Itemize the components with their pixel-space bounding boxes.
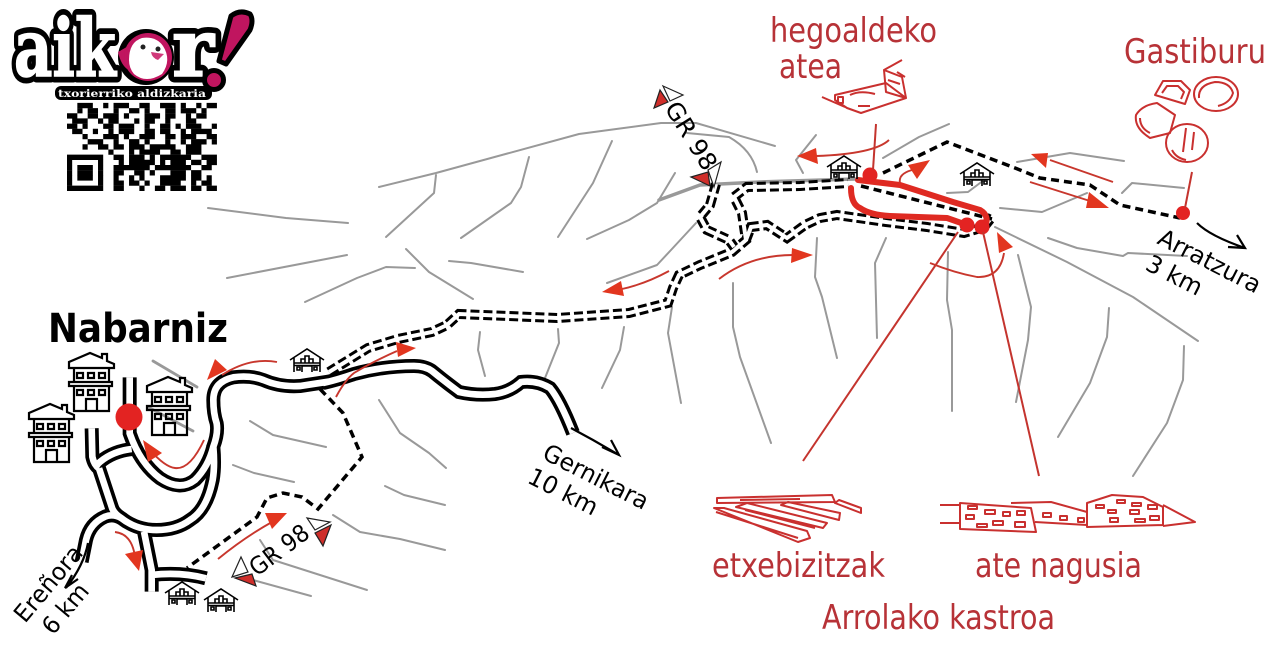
- logo tagline: [55, 86, 212, 100]
- red highlighted route: [851, 180, 987, 226]
- label: 10 km: 10 km: [523, 462, 603, 521]
- double dashed tracks: [329, 183, 992, 372]
- arrow to Gernika: [571, 428, 619, 455]
- label: atea: atea: [779, 47, 842, 87]
- logo wordmark: r: [172, 1, 215, 95]
- label: hegoaldeko: hegoaldeko: [770, 11, 937, 51]
- small arrow inside loop: [900, 160, 930, 183]
- logo exclamation mark: [204, 12, 252, 90]
- heading: Nabarniz: Nabarniz: [48, 306, 228, 352]
- label: Ereñora: Ereñora: [8, 539, 89, 628]
- logo wordmark: r: [172, 1, 215, 95]
- sketch: Gastiburu enclosures: [1136, 77, 1238, 162]
- arrow near castro: [930, 232, 1013, 277]
- red location dots: [116, 168, 1190, 430]
- label: ate nagusia: ate nagusia: [975, 546, 1142, 586]
- arrow along main road: [336, 342, 416, 397]
- logo tagline: txorierriko aldizkaria: [58, 88, 206, 100]
- logo bird: [118, 29, 174, 85]
- label: GR 98 bottom: GR 98: [244, 519, 315, 582]
- terrain contour lines: [148, 123, 1198, 596]
- arrow east on track: [719, 248, 813, 279]
- arrow at south gate: [797, 140, 889, 164]
- town houses: [29, 353, 192, 462]
- label: GR 98 top: GR 98: [659, 96, 723, 176]
- label: 3 km to Arratzura: 3 km: [1141, 249, 1207, 302]
- arrow downhill: [115, 532, 143, 571]
- sketch: main gate walls: [940, 495, 1195, 532]
- black destination arrows: [65, 223, 1245, 588]
- arrow to Ereño: [65, 543, 88, 588]
- direction arrows: [115, 140, 1113, 571]
- road network: [82, 366, 573, 592]
- label: Gernikara: Gernikara: [538, 438, 653, 516]
- dashed footpaths: [187, 142, 1180, 568]
- sketch: houses at castro: [714, 495, 861, 542]
- GR 98 waymarks: [232, 86, 721, 586]
- label: Arratzura: Arratzura: [1153, 223, 1266, 299]
- farm houses: [165, 156, 994, 612]
- label: etxebizitzak: etxebizitzak: [712, 546, 885, 586]
- logo wordmark: aik: [14, 1, 117, 95]
- arrow up GR 98: [218, 513, 287, 559]
- logo wordmark: [14, 1, 215, 95]
- sketch: south gate: [822, 60, 906, 113]
- leader lines: [803, 124, 1192, 476]
- arrow to Nabarniz: [207, 359, 277, 380]
- logo: aikor magazine: [14, 1, 252, 100]
- arrow west on track: [602, 271, 669, 296]
- logo wordmark: aik: [14, 1, 117, 95]
- arrow to town square: [143, 440, 204, 468]
- label: Arrolako kastroa: Arrolako kastroa: [822, 598, 1055, 638]
- arrow to Arratzura: [1197, 223, 1245, 248]
- arrow from Gastiburu: [1031, 153, 1113, 182]
- label: 6 km: 6 km: [36, 577, 95, 640]
- QR code: [67, 106, 217, 188]
- arrow to Gastiburu: [1030, 182, 1109, 208]
